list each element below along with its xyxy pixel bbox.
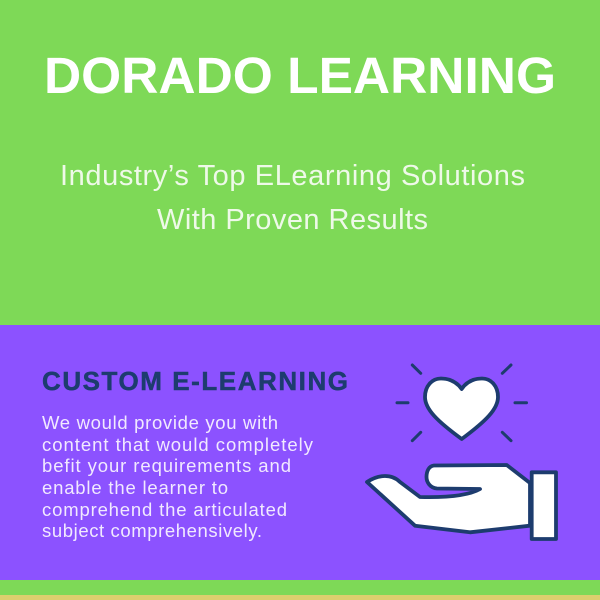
subtitle: With Proven Results — [157, 204, 428, 236]
icon: hand — [367, 465, 530, 532]
body text: enable the learner to — [42, 477, 228, 498]
body text — [42, 412, 314, 541]
body text: befit your requirements and — [42, 455, 291, 476]
band: yellow — [0, 595, 600, 600]
icon: rays — [397, 365, 526, 441]
body text: subject comprehensively. — [42, 520, 262, 541]
panel: custom e-learning — [0, 325, 600, 580]
icon: heart — [425, 378, 498, 439]
panel: green header — [0, 0, 600, 325]
subtitle — [60, 160, 525, 236]
heading: custom e-learning: CUSTOM E-LEARNING — [42, 366, 348, 396]
title: DORADO LEARNING — [44, 47, 556, 104]
subtitle: Industry’s Top ELearning Solutions — [60, 160, 525, 192]
band: green — [0, 580, 600, 595]
body text: We would provide you with — [42, 412, 278, 433]
body text: comprehend the articulated — [42, 499, 287, 520]
icon: hand holding heart — [367, 365, 556, 539]
icon: cuff — [532, 472, 556, 539]
body text: content that would completely — [42, 434, 314, 455]
